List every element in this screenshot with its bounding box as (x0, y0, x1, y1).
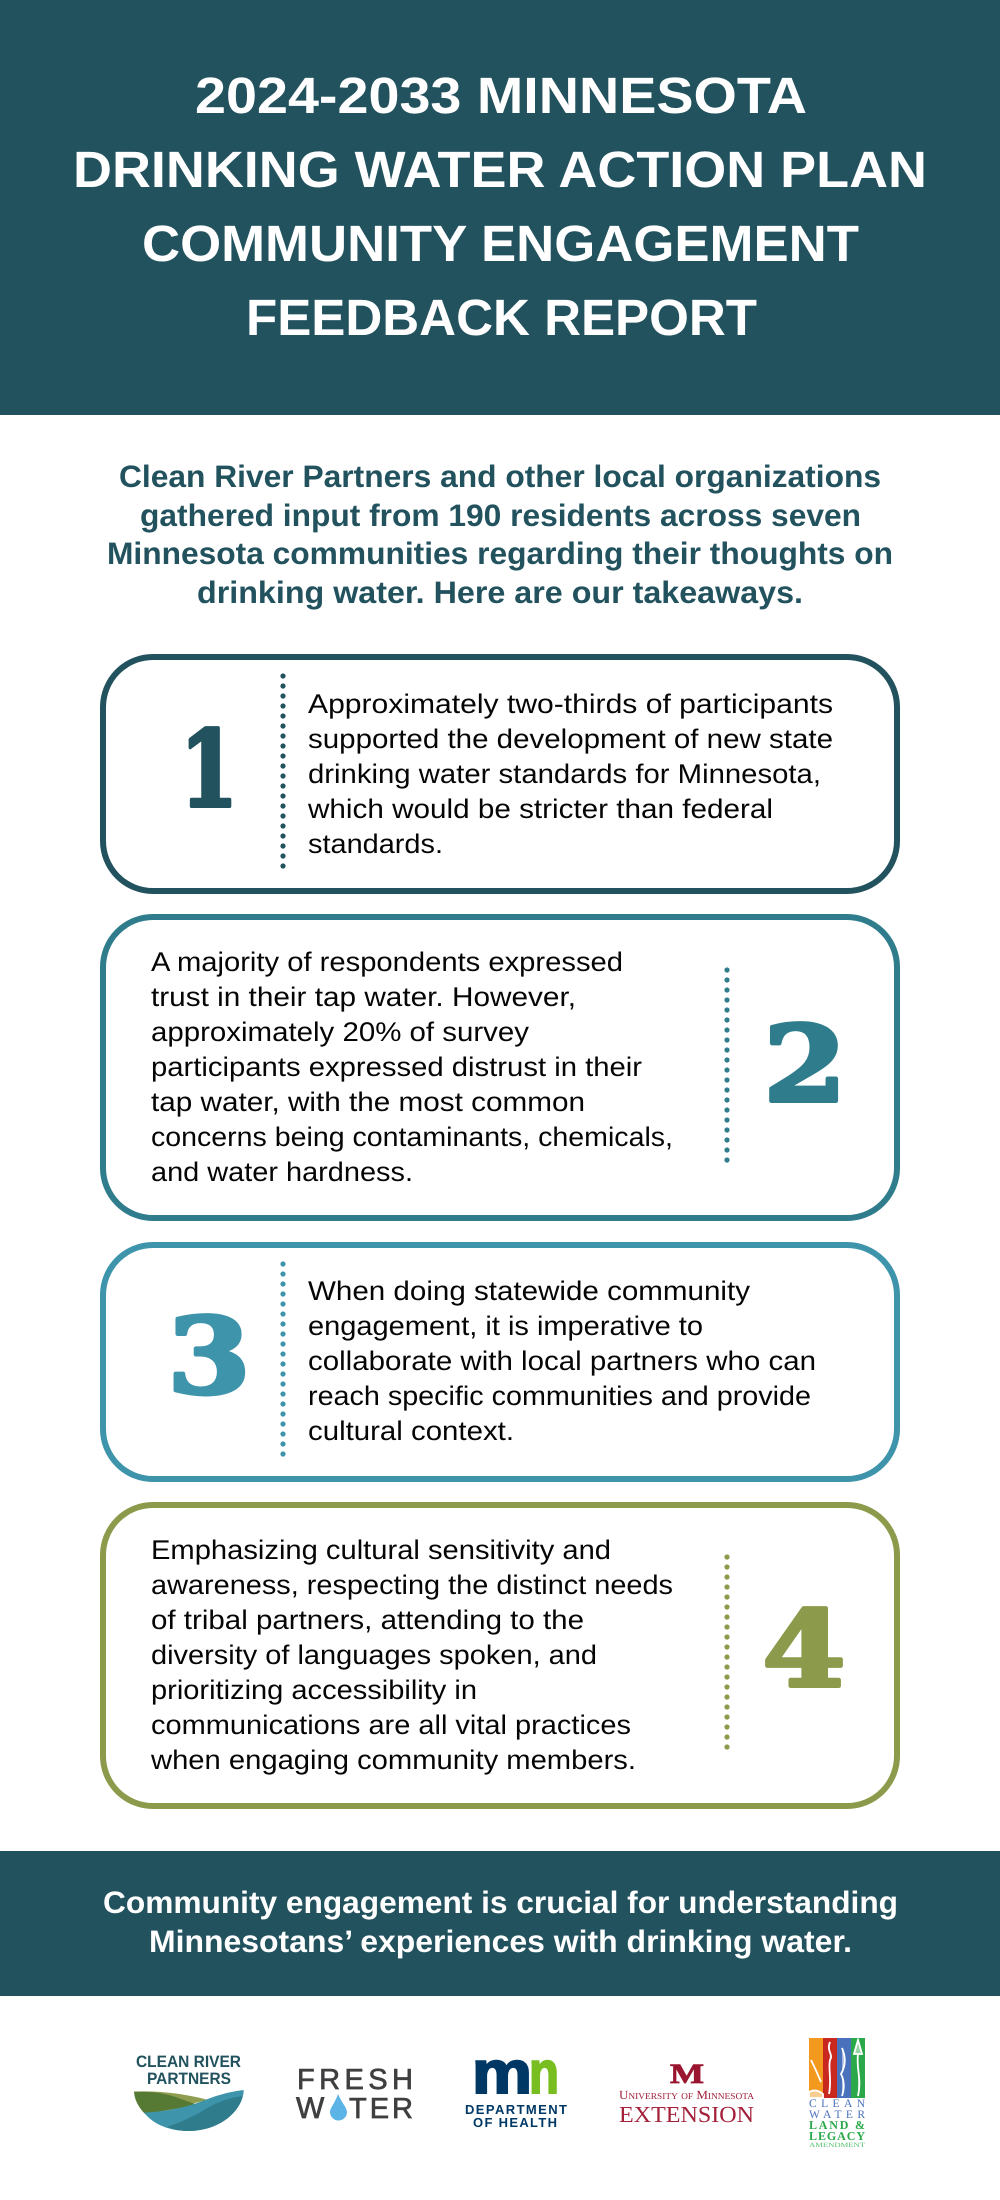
footer banner (0, 1851, 1000, 1996)
logo: Clean River Partners (134, 2053, 244, 2131)
takeaway 1 text: drinking water standards for Minnesota, (308, 759, 821, 789)
number 1: 1 (180, 707, 238, 831)
intro text: drinking water. Here are our takeaways. (197, 575, 803, 610)
title: DRINKING WATER ACTION PLAN (73, 141, 927, 198)
logo: University of Minnesota Extension: M (670, 2059, 704, 2090)
takeaway 1 text: supported the development of new state (308, 724, 833, 754)
takeaway 4 text: Emphasizing cultural sensitivity and (151, 1535, 611, 1565)
takeaway 2 text (151, 947, 673, 1187)
takeaway 4 text: when engaging community members. (150, 1745, 636, 1775)
logo: Clean Water Land and Legacy Amendment: CLEAN (809, 2098, 866, 2110)
takeaway 2 text: approximately 20% of survey (151, 1017, 530, 1047)
logo: Clean Water Land and Legacy Amendment: WATER (809, 2109, 865, 2121)
icon: arts and nature strips (809, 2038, 865, 2098)
logo: Minnesota Department of Health (465, 2039, 567, 2130)
takeaway 4 text: awareness, respecting the distinct needs (151, 1570, 673, 1600)
takeaway 4 text: communications are all vital practices (151, 1710, 631, 1740)
takeaway 2 text: participants expressed distrust in their (151, 1052, 642, 1082)
logo: Clean Water Land and Legacy Amendment: LEGACY (809, 2129, 865, 2143)
takeaway 3 text: engagement, it is imperative to (308, 1311, 703, 1341)
takeaway 2 text: concerns being contaminants, chemicals, (151, 1122, 673, 1152)
takeaway 2 text: A majority of respondents expressed (151, 947, 623, 977)
intro text: Clean River Partners and other local organizations (119, 459, 881, 494)
takeaway 1 text (307, 689, 833, 859)
icon: water drop (330, 2094, 347, 2120)
intro text (107, 459, 893, 610)
logo: University of Minnesota Extension (619, 2059, 755, 2127)
closing statement (103, 1885, 898, 1959)
number 2: 2 (764, 1002, 846, 1126)
takeaway 4 text: diversity of languages spoken, and (151, 1640, 597, 1670)
takeaway 3 text: cultural context. (308, 1416, 514, 1446)
logo: Clean Water Land and Legacy Amendment: LAND & (809, 2118, 865, 2132)
number 3: 3 (168, 1294, 250, 1418)
logo: Clean River Partners: PARTNERS (147, 2070, 231, 2088)
panel: takeaway 1 (103, 657, 897, 891)
intro text: Minnesota communities regarding their thoughts on (107, 536, 893, 571)
logo: Fresh Water: FRESH (297, 2064, 413, 2096)
logo: Clean River Partners: CLEAN RIVER (136, 2053, 241, 2071)
logo: Minnesota Department of Health: DEPARTMENT (465, 2102, 567, 2117)
takeaway 4 text: prioritizing accessibility in (151, 1675, 477, 1705)
takeaway 1 text: Approximately two-thirds of participants (308, 689, 833, 719)
logo: Fresh Water: W (296, 2092, 325, 2125)
title: COMMUNITY ENGAGEMENT (142, 215, 859, 272)
logo: Minnesota Department of Health: n (529, 2039, 559, 2106)
takeaway 3 text (308, 1276, 816, 1446)
header banner (0, 0, 1000, 415)
number 4: 4 (762, 1587, 846, 1711)
title (73, 67, 927, 346)
takeaway 2 text: trust in their tap water. However, (151, 982, 576, 1012)
takeaway 4 text (150, 1535, 673, 1775)
logo: Fresh Water (296, 2064, 413, 2125)
logo: University of Minnesota Extension: EXTENSION (619, 2102, 754, 2127)
intro text: gathered input from 190 residents across seven (140, 498, 861, 533)
takeaway 3 text: collaborate with local partners who can (308, 1346, 816, 1376)
logo: Clean Water Land and Legacy Amendment (809, 2038, 866, 2149)
takeaway 3 text: When doing statewide community (308, 1276, 751, 1306)
takeaway 2 text: and water hardness. (151, 1157, 413, 1187)
closing statement: Minnesotans’ experiences with drinking water. (149, 1924, 852, 1959)
takeaway 1 text: which would be stricter than federal (307, 794, 773, 824)
title: FEEDBACK REPORT (246, 289, 757, 346)
icon: hills and river bowl (134, 2090, 244, 2131)
closing statement: Community engagement is crucial for understanding (103, 1885, 898, 1920)
logo: University of Minnesota Extension: University of Minnesota (619, 2088, 755, 2102)
logo: Clean Water Land and Legacy Amendment: AMENDMENT (809, 2142, 865, 2149)
panel: takeaway 2 (103, 917, 897, 1218)
title: 2024-2033 MINNESOTA (195, 67, 807, 124)
panel: takeaway 4 (103, 1505, 897, 1806)
panel: takeaway 3 (103, 1245, 897, 1479)
logo: Minnesota Department of Health: OF HEALTH (473, 2115, 557, 2130)
takeaway 4 text: of tribal partners, attending to the (151, 1605, 584, 1635)
logo: Minnesota Department of Health: m (472, 2039, 532, 2106)
takeaway 2 text: tap water, with the most common (151, 1087, 585, 1117)
takeaway 1 text: standards. (308, 829, 443, 859)
logo: Fresh Water: TER (349, 2093, 413, 2125)
takeaway 3 text: reach specific communities and provide (308, 1381, 811, 1411)
